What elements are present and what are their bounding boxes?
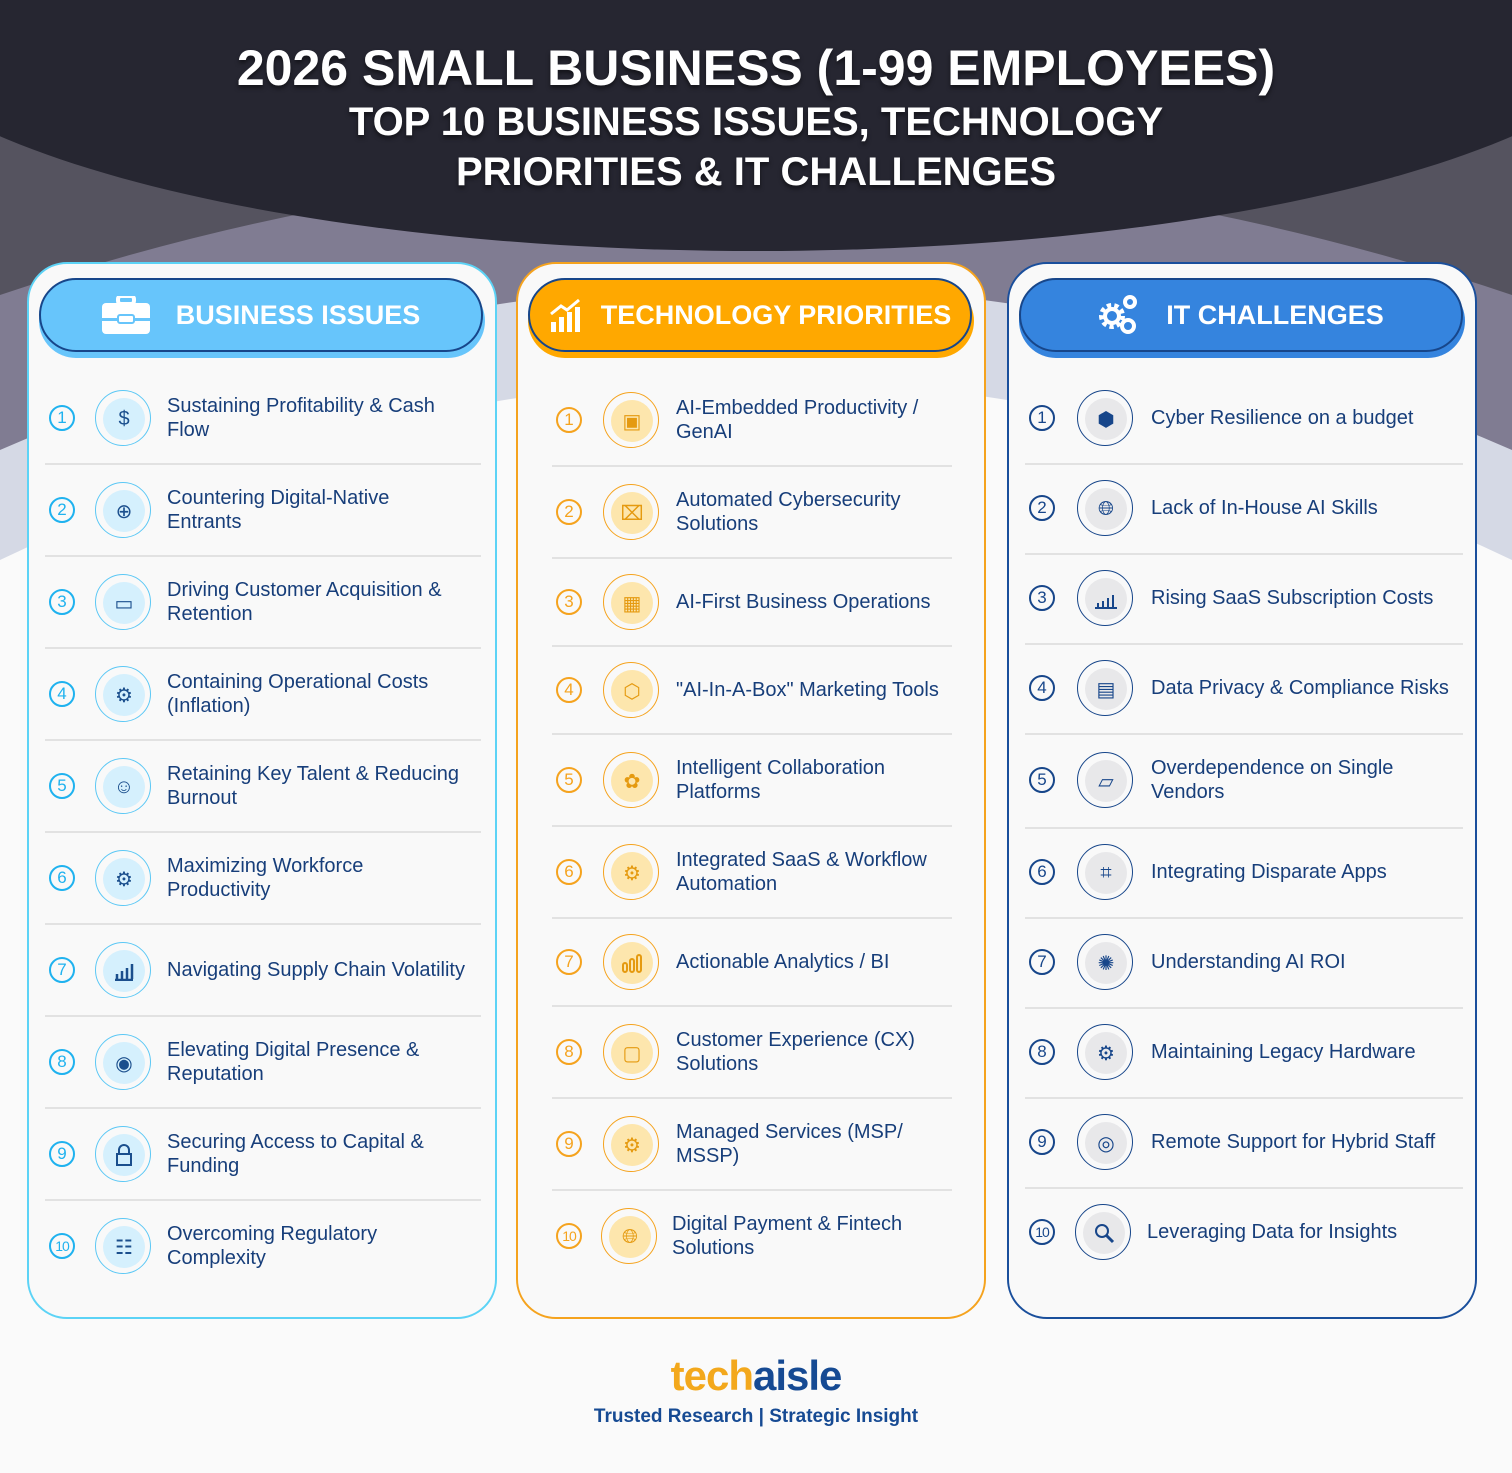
heading: technology priorities: TECHNOLOGY PRIORITIES: [601, 300, 951, 330]
item 8: Customer Experience (CX): [676, 1029, 915, 1051]
item 5: Retaining Key Talent & Reducing: [167, 763, 459, 785]
item 1: Sustaining Profitability & Cash: [167, 395, 435, 417]
item 7: ✺: [1098, 952, 1114, 974]
item 8: [1029, 1024, 1416, 1080]
item 7: Navigating Supply Chain Volatility: [167, 959, 465, 981]
item 3: 3: [1037, 588, 1047, 607]
item 2: Lack of In-House AI Skills: [1151, 497, 1378, 519]
item 6: ⌗: [1100, 862, 1112, 884]
item 8: ▢: [623, 1042, 641, 1064]
item 10: Digital Payment & Fintech: [672, 1213, 902, 1235]
item 3: AI-First Business Operations: [676, 591, 931, 613]
heading: IT challenges: [1019, 278, 1465, 358]
item 4: Data Privacy & Compliance Risks: [1151, 677, 1449, 699]
item 10: ☷: [115, 1236, 133, 1258]
item 1: ⬢: [1097, 408, 1115, 430]
item 9: ◎: [1097, 1132, 1115, 1154]
item 1: Cyber Resilience on a budget: [1151, 407, 1413, 429]
item 1: 1: [57, 408, 67, 427]
item 5: ✿: [624, 770, 640, 792]
item 2: 2: [564, 502, 574, 521]
item 2: Countering Digital-Native: [167, 487, 389, 509]
item 10: Solutions: [672, 1237, 754, 1259]
item 7: [49, 942, 465, 998]
item 5: Burnout: [167, 787, 237, 809]
item 3: ▭: [115, 592, 133, 614]
item 10: 10: [562, 1228, 576, 1244]
item 5: ☺: [114, 776, 134, 798]
item 1: AI-Embedded Productivity /: [676, 397, 918, 419]
item 1: 1: [564, 410, 574, 429]
item 2: ⌧: [620, 502, 644, 524]
item 10: 10: [55, 1238, 69, 1254]
item 6: 6: [1037, 862, 1047, 881]
item 6: [556, 844, 927, 900]
item 9: 9: [1037, 1132, 1047, 1151]
item 4: 4: [57, 684, 67, 703]
item 1: [556, 392, 918, 448]
item 6: Automation: [676, 873, 777, 895]
item 2: [556, 484, 901, 540]
item 7: [556, 934, 889, 990]
item 4: 4: [1037, 678, 1047, 697]
subtitle: [349, 100, 1163, 194]
panel: IT challenges: [1007, 262, 1477, 1319]
item 5: [556, 752, 885, 808]
item 10: Complexity: [167, 1247, 266, 1269]
item 7: 7: [1037, 952, 1047, 971]
item 1: Flow: [167, 419, 209, 441]
item 5: ▱: [1098, 770, 1114, 792]
item 4: ⚙: [115, 684, 133, 706]
item 8: Solutions: [676, 1053, 758, 1075]
title: 2026 SMALL BUSINESS (1-99 EMPLOYEES): [237, 40, 1275, 96]
item 8: 8: [57, 1052, 67, 1071]
subtitle: PRIORITIES & IT CHALLENGES: [456, 150, 1056, 194]
item 9: Securing Access to Capital &: [167, 1131, 424, 1153]
item 5: Platforms: [676, 781, 760, 803]
item 5: 5: [1037, 770, 1047, 789]
panel: technology priorities: [516, 262, 986, 1319]
item 3: Driving Customer Acquisition &: [167, 579, 442, 601]
item 4: [1029, 660, 1449, 716]
item 5: 5: [57, 776, 67, 795]
item 7: Understanding AI ROI: [1151, 951, 1346, 973]
item 10: Leveraging Data for Insights: [1147, 1221, 1397, 1243]
item 9: [556, 1116, 903, 1172]
item 1: [49, 390, 435, 446]
item 10: [1029, 1204, 1397, 1260]
item 7: 7: [57, 960, 67, 979]
item 8: ⚙: [1097, 1042, 1115, 1064]
item 10: [49, 1218, 377, 1274]
item 10: 🌐︎: [622, 1226, 638, 1248]
item 2: 🌐︎: [1098, 498, 1114, 520]
item 6: 6: [564, 862, 574, 881]
item 6: Integrating Disparate Apps: [1151, 861, 1387, 883]
item 5: Intelligent Collaboration: [676, 757, 885, 779]
item 3: Retention: [167, 603, 253, 625]
item 3: [1029, 570, 1433, 626]
item 2: Solutions: [676, 513, 758, 535]
heading: business issues: [39, 278, 485, 358]
item 10: [556, 1208, 902, 1264]
item 1: [1029, 390, 1414, 446]
item 9: 9: [57, 1144, 67, 1163]
item 7: 7: [564, 952, 574, 971]
item 3: [556, 574, 931, 630]
item 6: Maximizing Workforce: [167, 855, 363, 877]
heading: business issues: BUSINESS ISSUES: [176, 300, 420, 330]
panel: business issues: [27, 262, 497, 1319]
heading: technology priorities: [528, 278, 974, 358]
item 6: ⚙: [623, 862, 641, 884]
tagline: Trusted Research | Strategic Insight: [594, 1406, 918, 1427]
item 7: [1029, 934, 1346, 990]
item 8: ◉: [115, 1052, 133, 1074]
item 2: 2: [1037, 498, 1047, 517]
item 8: Reputation: [167, 1063, 264, 1085]
item 5: Overdependence on Single: [1151, 757, 1393, 779]
item 1: 1: [1037, 408, 1047, 427]
item 7: Actionable Analytics / BI: [676, 951, 889, 973]
item 3: ▦: [623, 592, 641, 614]
item 9: Remote Support for Hybrid Staff: [1151, 1131, 1435, 1153]
item 6: [1029, 844, 1387, 900]
item 4: ⬡: [623, 680, 641, 702]
item 3: 3: [564, 592, 574, 611]
item 1: $: [118, 408, 130, 430]
item 4: ▤: [1097, 678, 1115, 700]
item 8: Elevating Digital Presence &: [167, 1039, 419, 1061]
item 2: 2: [57, 500, 67, 519]
item 5: 5: [564, 770, 574, 789]
item 3: Rising SaaS Subscription Costs: [1151, 587, 1433, 609]
subtitle: TOP 10 BUSINESS ISSUES, TECHNOLOGY: [349, 100, 1163, 144]
item 8: Maintaining Legacy Hardware: [1151, 1041, 1416, 1063]
logo: techaisle: techaisle: [671, 1352, 841, 1399]
heading: IT challenges: IT CHALLENGES: [1166, 300, 1384, 330]
item 4: [556, 662, 939, 718]
item 1: GenAI: [676, 421, 733, 443]
background: [0, 0, 1512, 560]
item 4: 4: [564, 680, 574, 699]
item 2: Automated Cybersecurity: [676, 489, 901, 511]
item 9: ⚙: [623, 1134, 641, 1156]
item 9: Managed Services (MSP/: [676, 1121, 903, 1143]
item 2: Entrants: [167, 511, 241, 533]
item 9: [1029, 1114, 1436, 1170]
item 2: [49, 482, 389, 538]
item 10: Overcoming Regulatory: [167, 1223, 377, 1245]
item 5: [49, 758, 459, 814]
item 6: ⚙: [115, 868, 133, 890]
item 10: 10: [1035, 1224, 1049, 1240]
item 2: ⊕: [116, 500, 132, 522]
item 4: Containing Operational Costs: [167, 671, 428, 693]
item 8: 8: [564, 1042, 574, 1061]
item 9: MSSP): [676, 1145, 739, 1167]
item 9: Funding: [167, 1155, 239, 1177]
item 6: [49, 850, 363, 906]
item 6: Productivity: [167, 879, 270, 901]
item 3: [49, 574, 442, 630]
item 3: 3: [57, 592, 67, 611]
item 8: 8: [1037, 1042, 1047, 1061]
item 5: Vendors: [1151, 781, 1224, 803]
item 6: 6: [57, 868, 67, 887]
item 4: [49, 666, 428, 722]
item 4: "AI-In-A-Box" Marketing Tools: [676, 679, 939, 701]
item 4: (Inflation): [167, 695, 250, 717]
item 8: [556, 1024, 915, 1080]
item 5: [1029, 752, 1393, 808]
item 8: [49, 1034, 420, 1090]
item 9: 9: [564, 1134, 574, 1153]
item 1: ▣: [623, 410, 641, 432]
item 6: Integrated SaaS & Workflow: [676, 849, 927, 871]
item 2: [1029, 480, 1378, 536]
item 9: [49, 1126, 424, 1182]
